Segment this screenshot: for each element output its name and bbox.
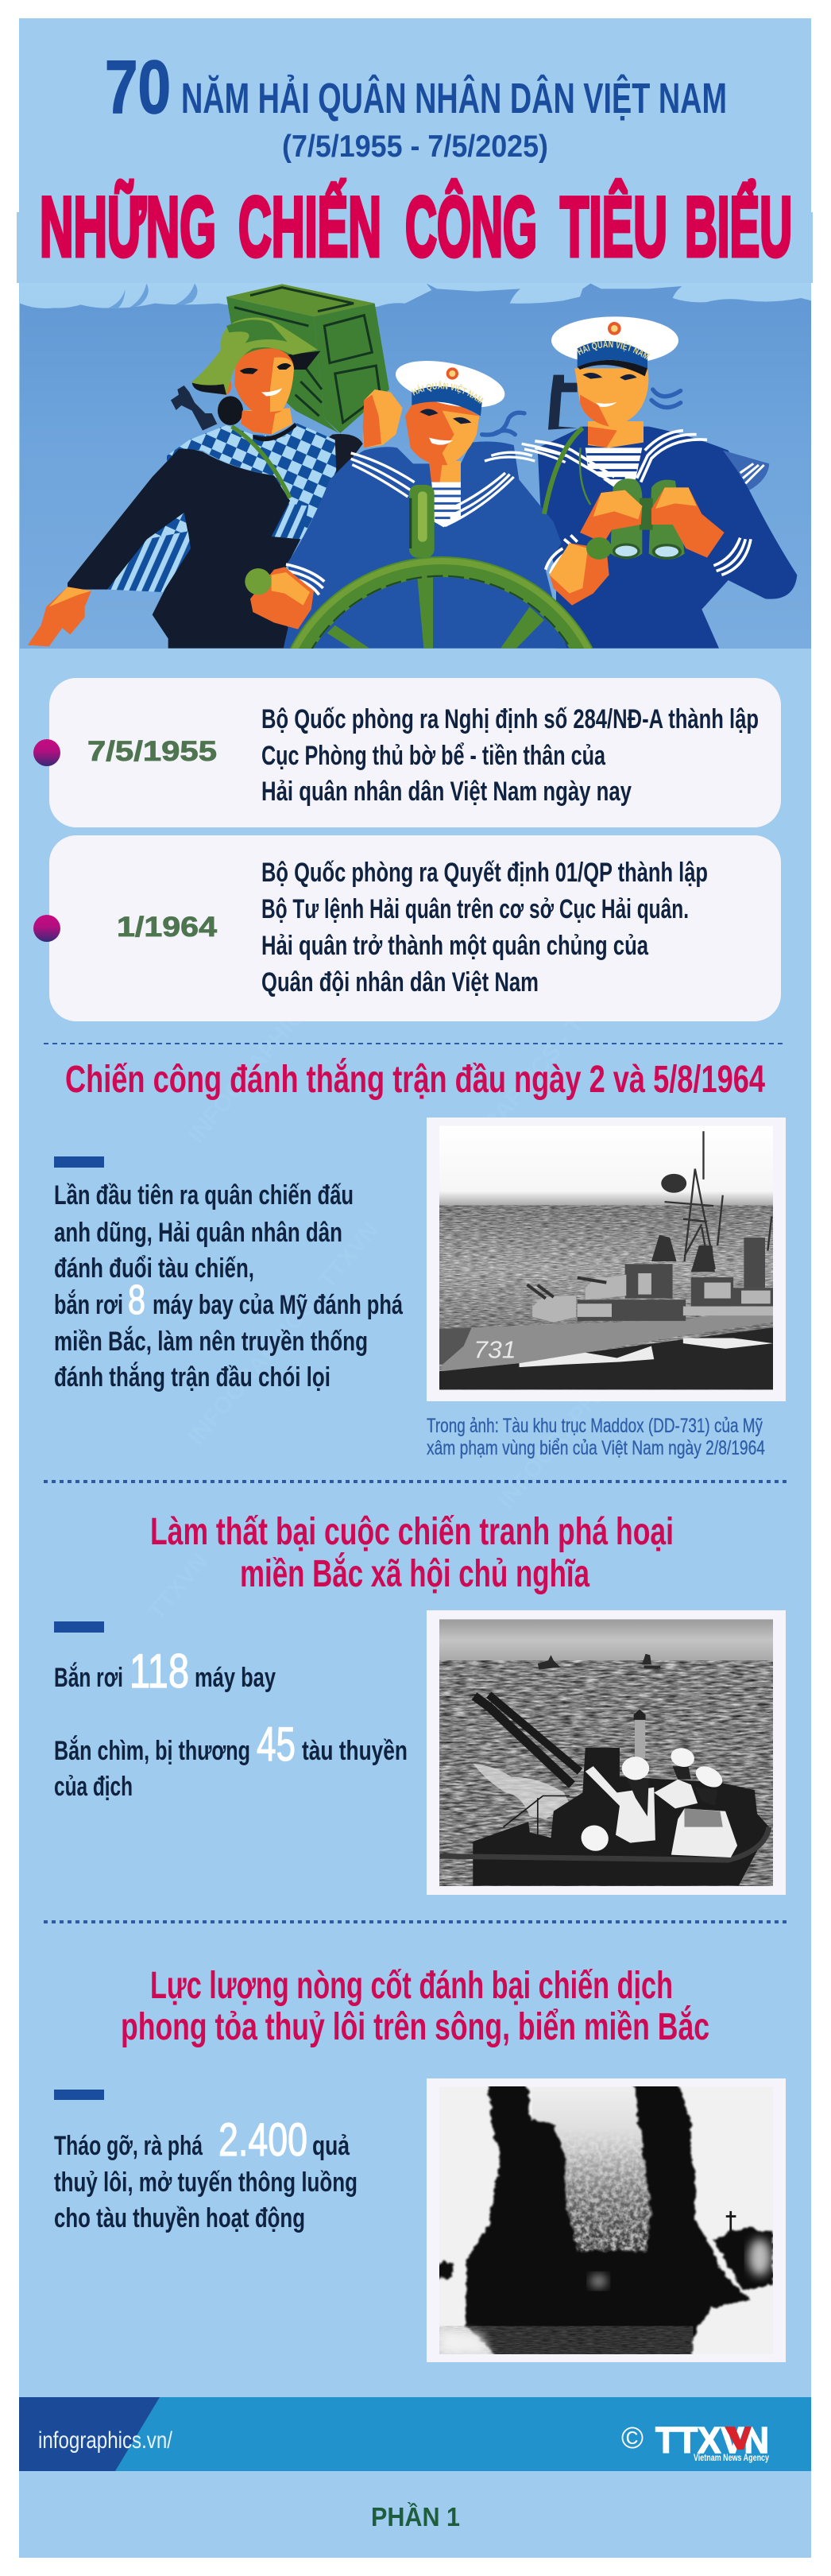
watermarks: INFOGRAPHICS - TTXVN — [183, 1217, 385, 1450]
section heading: air war — [150, 1511, 674, 1595]
photo: anti-aircraft gun crew — [427, 1610, 786, 1895]
figure: sailors: HẢI QUÂN VIỆT NAM — [412, 381, 484, 404]
icon: distant sails — [109, 284, 197, 308]
left cuff and fist of middle sailor — [245, 564, 324, 629]
photo: destroyer Maddox — [427, 1118, 786, 1401]
title: main red heading: CHIẾN — [238, 179, 381, 274]
stat: 118 aircraft: 118 — [129, 1644, 189, 1698]
section 3 text block — [54, 2090, 358, 2233]
section 2 text block — [54, 1621, 408, 1802]
card text — [261, 858, 708, 997]
part label: PHẦN 1 — [371, 2502, 460, 2531]
card text: Hải quân trở thành một quân chủng của — [261, 931, 649, 961]
section 2 text block: Bắn chìm, bị thương — [54, 1736, 250, 1766]
section heading: air war: miền Bắc xã hội chủ nghĩa — [240, 1551, 589, 1595]
sea and warship silhouettes — [20, 284, 811, 649]
section 3 text block: thuỷ lôi, mở tuyến thông luồng — [54, 2167, 358, 2198]
card text — [261, 704, 759, 807]
figure: sailors — [245, 316, 798, 649]
section 2 text block: tàu thuyền — [302, 1736, 408, 1766]
binoculars — [610, 478, 685, 560]
section heading: mine blockade — [121, 1965, 709, 2048]
date 7/5/1955: 7/5/1955 — [87, 736, 217, 767]
logo: TTXVN: TTXVN — [655, 2419, 769, 2461]
section 3 text block: Tháo gỡ, rà phá — [54, 2131, 203, 2161]
illustration: navy sailors and militia woman poster — [20, 283, 811, 649]
section 1 text block: bắn rơi — [54, 1290, 123, 1320]
title: main red heading: CÔNG — [405, 179, 537, 274]
watermarks: INFOGRAPHICS - TTXVN — [493, 1280, 694, 1513]
title: main red heading: TIÊU — [560, 179, 667, 274]
section 1 text block: Lần đầu tiên ra quân chiến đấu — [54, 1180, 354, 1211]
subtitle: dates: (7/5/1955 - 7/5/2025) — [282, 130, 548, 164]
title: main red heading: NHỮNG — [40, 179, 216, 274]
watermarks: INFOGRAPHICS - TTXVN — [183, 915, 385, 1148]
section 1 text block: miền Bắc, làm nên truyền thống — [54, 1327, 368, 1357]
photo: mine explosions — [427, 2078, 786, 2362]
figure: militia woman — [28, 284, 389, 649]
stat: 2.400 mines: 2.400 — [218, 2114, 307, 2166]
card text: Cục Phòng thủ bờ bể - tiền thân của — [261, 741, 606, 771]
logo: TTXVN: Vietnam News Agency — [694, 2452, 769, 2463]
panel: timeline card 1955 — [33, 678, 781, 827]
date 1/1964: 1/1964 — [117, 912, 218, 943]
stat: 45 vessels: 45 — [257, 1718, 296, 1771]
title: main red heading — [40, 179, 792, 274]
section 2 text block: Bắn rơi — [54, 1663, 123, 1693]
right sailor head — [588, 421, 644, 447]
icon: timeline dot — [33, 739, 60, 766]
watermarks: TTXVN — [143, 1548, 214, 1625]
section 1 text block: máy bay của Mỹ đánh phá — [153, 1290, 403, 1320]
caption: photo 1 — [427, 1415, 765, 1459]
icon: timeline dot — [33, 915, 60, 942]
section 3 text block: cho tàu thuyền hoạt động — [54, 2203, 305, 2233]
right sailor lower fist — [550, 543, 609, 606]
section 1 text block: đánh thắng trận đầu chói lọi — [54, 1362, 330, 1393]
watermarks: INFOGRAPHICS - TTXVN — [429, 963, 631, 1195]
panel: timeline card 1964 — [33, 835, 781, 1021]
card text: Quân đội nhân dân Việt Nam — [261, 967, 539, 997]
title: 70 years heading: 70 — [105, 45, 171, 130]
card text: Hải quân nhân dân Việt Nam ngày nay — [261, 777, 632, 807]
footer bar — [19, 2397, 811, 2471]
section 1 text block — [54, 1156, 403, 1393]
figure: sailors: HẢI QUÂN VIỆT NAM — [577, 339, 650, 359]
hull number: 731 — [473, 1336, 516, 1363]
ship wheel — [275, 485, 608, 894]
section 2 text block: máy bay — [195, 1663, 276, 1693]
watermarks — [143, 915, 694, 1625]
source: infographics.vn: infographics.vn/ — [38, 2427, 173, 2454]
section 1 text block: đánh đuổi tàu chiến, — [54, 1253, 254, 1284]
raised hand of middle sailor — [363, 389, 403, 447]
section 1 text block: anh dũng, Hải quân nhân dân — [54, 1218, 342, 1248]
stat: 8 aircraft: 8 — [128, 1277, 145, 1323]
logo: TTXVN: © — [621, 2422, 644, 2455]
section 3 text block: quả — [312, 2131, 350, 2161]
section 2 text block: của địch — [54, 1772, 133, 1802]
title: 70 years heading — [105, 45, 727, 130]
